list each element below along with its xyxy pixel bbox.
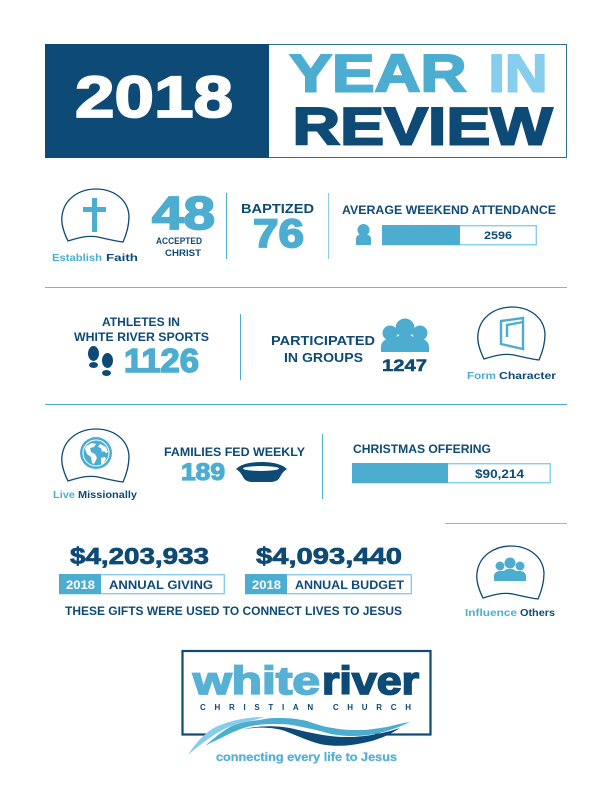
label: influence others: Others	[520, 607, 555, 619]
label: form character: Form	[467, 370, 496, 382]
bar: offering	[352, 463, 550, 483]
stat: annual budget: ANNUAL BUDGET	[295, 580, 404, 592]
icon: person	[356, 224, 371, 245]
icon: people in arch	[477, 546, 544, 599]
label: form character	[467, 370, 556, 382]
stat: athletes in white river sports	[74, 317, 209, 379]
title: year in review: REVIEW	[292, 98, 552, 156]
stat: 48 accepted christ: CHRIST	[165, 248, 201, 259]
icon: cross in arch	[62, 189, 129, 242]
stat: baptized 76	[241, 202, 314, 256]
stat: athletes in white river sports: 1126	[124, 342, 199, 379]
label: establish faith	[52, 252, 138, 264]
panel: establish faith	[52, 189, 138, 264]
label: establish faith: Faith	[106, 252, 138, 264]
caption: gifts statement: THESE GIFTS WERE USED TO CONNECT LIVES TO JESUS	[65, 606, 402, 618]
year 2018: 2018	[75, 65, 233, 130]
bar: attendance: 2596	[484, 230, 512, 242]
panel: influence others	[465, 546, 555, 619]
stat: 48 accepted christ: 48	[152, 187, 215, 239]
label: form character: Character	[499, 370, 556, 382]
title: year in review: IN	[488, 44, 548, 104]
stat: average weekend attendance: AVERAGE WEEKEND ATTENDANCE	[342, 205, 556, 217]
bar: offering: $90,214	[475, 469, 525, 481]
icon: globe in arch	[62, 429, 129, 482]
label: influence others: Influence	[465, 607, 517, 619]
panel: form character	[467, 307, 556, 382]
stat: athletes in white river sports: ATHLETES IN	[102, 317, 180, 329]
stat: participated in groups: 1247	[382, 356, 427, 375]
stat: annual giving: 2018	[66, 580, 96, 592]
logo tagline: connecting every life to Jesus	[216, 750, 397, 764]
icon: footprints	[88, 346, 113, 376]
label: establish faith: Establish	[52, 252, 102, 264]
stat: 48 accepted christ: ACCEPTED	[156, 236, 202, 247]
logo wordmark: river	[322, 660, 419, 703]
label: live missionally	[53, 489, 137, 501]
label: live missionally: Live	[53, 489, 75, 501]
stat: christmas offering: CHRISTMAS OFFERING	[353, 444, 491, 456]
logo wordmark	[192, 660, 419, 703]
icon: door in arch	[478, 307, 545, 360]
logo wave	[188, 717, 410, 755]
label: live missionally: Missionally	[78, 489, 137, 501]
logo wordmark: white	[192, 660, 320, 703]
stat: annual giving: $4,203,933	[70, 543, 209, 569]
stat: families fed weekly: 189	[181, 459, 225, 486]
stat: annual budget: $4,093,440	[256, 543, 402, 569]
stat: families fed weekly	[164, 447, 305, 486]
stat: annual budget	[245, 543, 411, 594]
stat: 48 accepted christ	[152, 187, 215, 259]
logo: white river christian church	[182, 651, 430, 764]
panel: live missionally	[53, 429, 137, 501]
stat: athletes in white river sports: WHITE RIVER SPORTS	[74, 332, 209, 344]
stat: baptized 76: 76	[253, 212, 304, 256]
stat: participated in groups: IN GROUPS	[284, 350, 363, 365]
stat: annual giving	[59, 543, 224, 594]
stat: annual budget: 2018	[252, 580, 282, 592]
title: year in review: YEAR	[290, 44, 466, 104]
icon: bowl	[236, 462, 287, 482]
stat: average weekend attendance	[342, 205, 556, 245]
stat: families fed weekly: FAMILIES FED WEEKLY	[164, 447, 305, 459]
stat: baptized 76: BAPTIZED	[241, 202, 314, 216]
header banner	[45, 44, 566, 158]
logo: white river christian church: CHRISTIAN CHURCH	[200, 703, 411, 712]
icon: group of people	[381, 318, 429, 352]
stat: participated in groups	[271, 318, 429, 375]
stat: annual giving: ANNUAL GIVING	[109, 580, 213, 592]
title: year in review	[290, 44, 552, 156]
stat: christmas offering	[352, 444, 550, 483]
bar: attendance	[382, 225, 536, 245]
label: influence others	[465, 607, 555, 619]
stat: participated in groups: PARTICIPATED	[271, 333, 375, 348]
